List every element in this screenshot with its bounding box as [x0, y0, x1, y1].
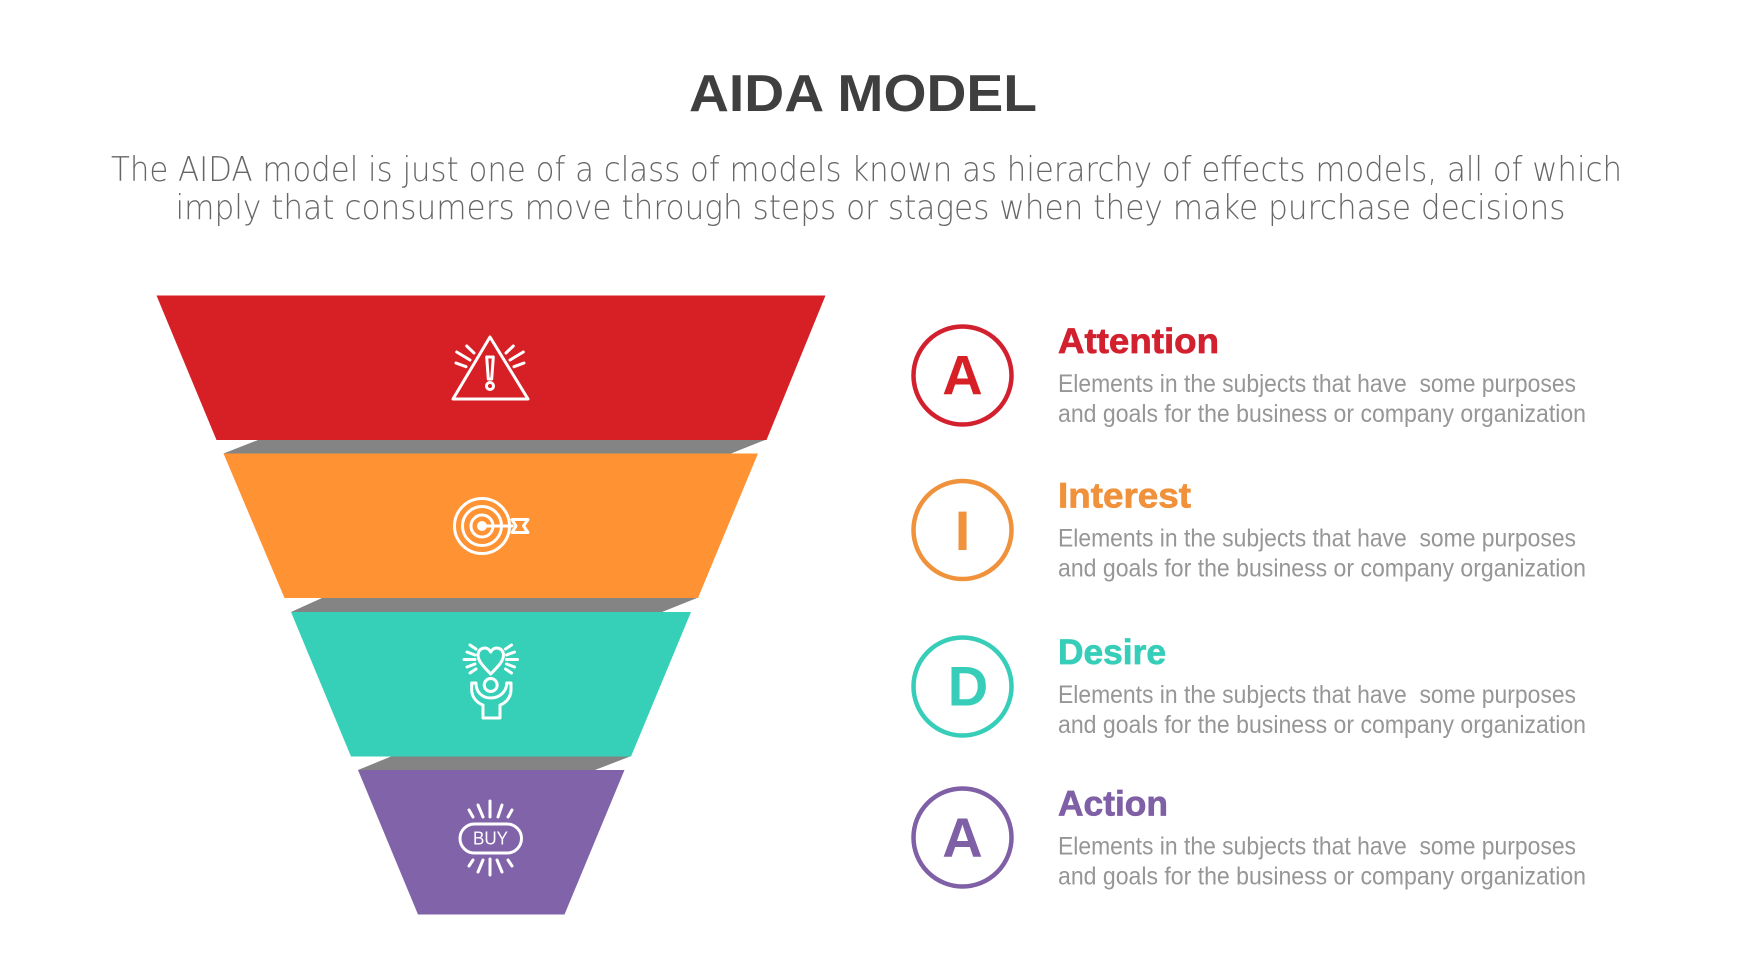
heading: interest: Interest — [1058, 476, 1191, 516]
title: AIDA MODEL — [689, 65, 1037, 123]
badge: I — [914, 481, 1012, 579]
funnel segment: interest — [224, 454, 758, 598]
subtitle text block — [111, 150, 1622, 228]
step: interest — [914, 476, 1586, 582]
description — [1058, 370, 1586, 428]
badge: A: A — [942, 344, 983, 406]
badge: A: A — [942, 806, 983, 869]
icon: buy button with rays — [460, 801, 522, 875]
icon: heart and raised hands — [464, 645, 518, 718]
badge: A — [914, 326, 1012, 424]
heading: desire: Desire — [1058, 633, 1166, 672]
description: and goals for the business or company organization — [1058, 711, 1586, 739]
description — [1058, 524, 1586, 582]
step: desire — [914, 633, 1586, 739]
description — [1058, 681, 1586, 739]
funnel chart — [156, 296, 826, 914]
description: Elements in the subjects that have some purposes — [1058, 524, 1576, 552]
funnel segment: desire — [291, 612, 691, 756]
funnel connector shadows — [224, 440, 765, 770]
icon: warning triangle — [453, 337, 528, 399]
icon: target with arrow — [454, 498, 528, 554]
step: attention — [914, 322, 1586, 428]
funnel segment: attention — [156, 296, 826, 440]
description: and goals for the business or company organization — [1058, 554, 1586, 582]
icon: buy button with rays: BUY — [473, 828, 508, 848]
badge: I: I — [955, 499, 970, 562]
description: and goals for the business or company organization — [1058, 400, 1586, 428]
badge: D — [914, 638, 1012, 736]
subtitle text block: imply that consumers move through steps or stages when they make purchase decisions — [176, 188, 1566, 228]
step: action — [914, 784, 1586, 890]
description: Elements in the subjects that have some purposes — [1058, 370, 1576, 398]
heading: attention: Attention — [1058, 322, 1219, 361]
funnel segment: action — [358, 770, 624, 914]
heading: action: Action — [1058, 784, 1168, 824]
subtitle text block: The AIDA model is just one of a class of models known as hierarchy of effects models, all of which — [111, 150, 1622, 190]
description: Elements in the subjects that have some purposes — [1058, 832, 1576, 860]
badge: D: D — [948, 654, 988, 718]
description: Elements in the subjects that have some purposes — [1058, 681, 1576, 709]
description — [1058, 832, 1586, 890]
badge: A — [914, 788, 1012, 886]
description: and goals for the business or company organization — [1058, 862, 1586, 890]
